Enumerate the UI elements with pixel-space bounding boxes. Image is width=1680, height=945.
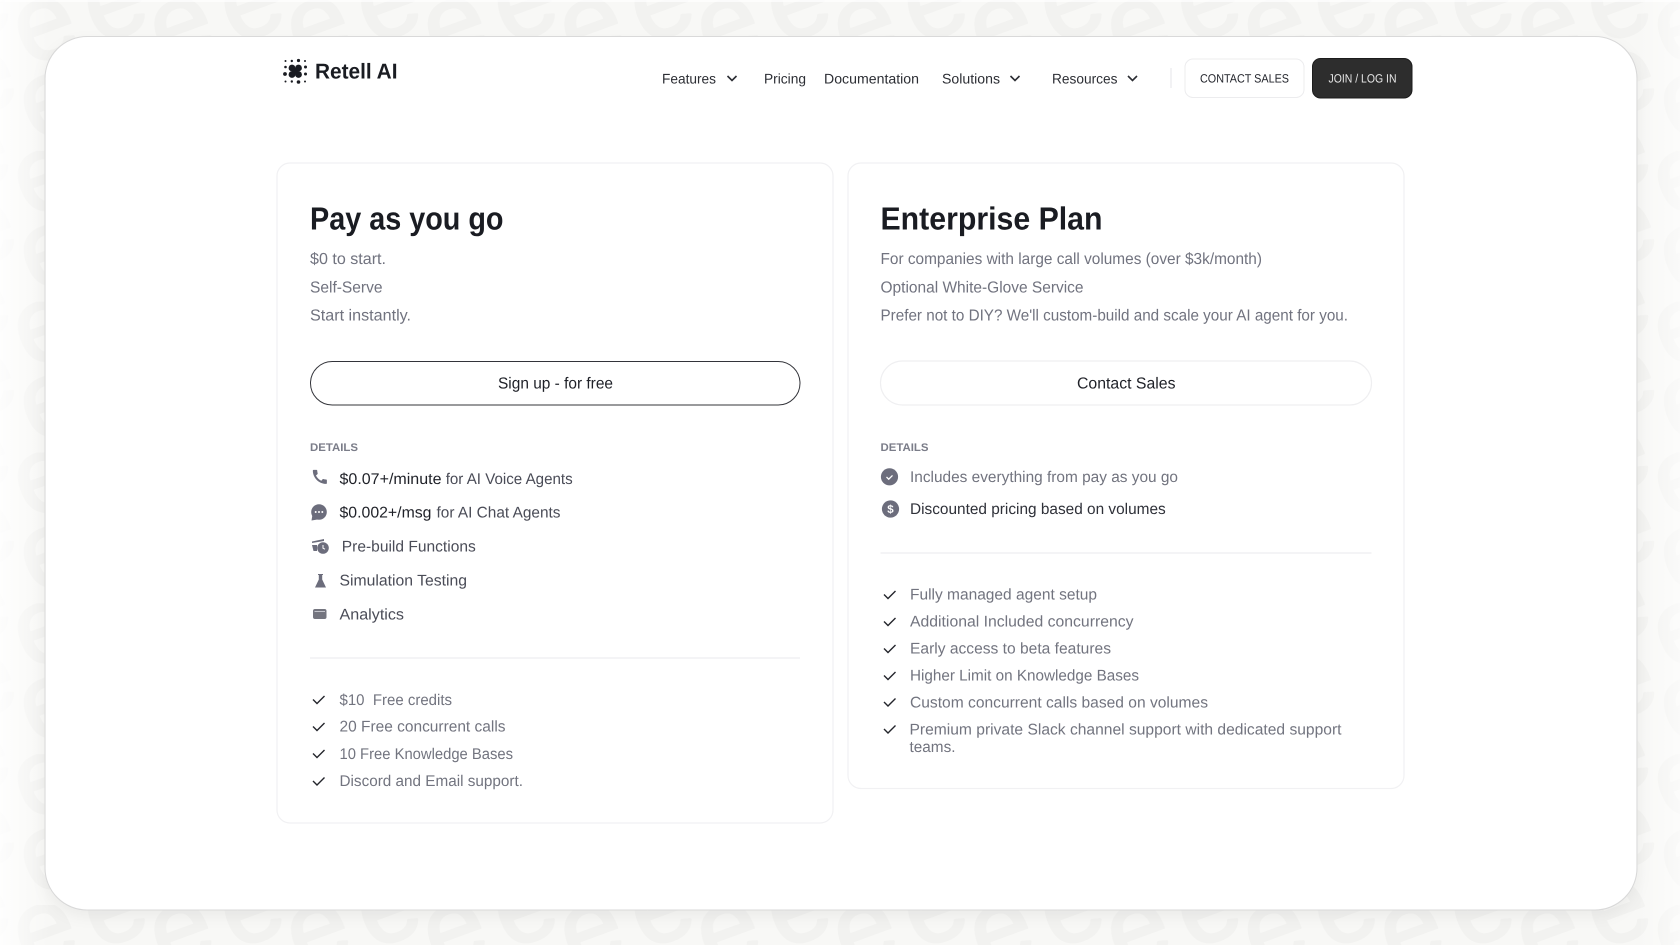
item: slack support xyxy=(884,722,1342,756)
intro text: $0 to start. xyxy=(310,251,386,268)
details label: DETAILS xyxy=(880,442,928,454)
discounted row: $ xyxy=(887,504,894,516)
button: join / log in: JOIN / LOG IN xyxy=(1328,72,1396,86)
button: contact sales: CONTACT SALES xyxy=(1200,72,1289,86)
heading: pay as you go: Pay as you go xyxy=(310,200,504,236)
voice price row: for AI Voice Agents xyxy=(446,471,573,488)
intro text xyxy=(310,251,411,324)
intro text: Start instantly. xyxy=(310,308,411,324)
button: sign up xyxy=(310,362,800,405)
item: beta: Early access to beta features xyxy=(910,640,1111,658)
voice price row: $0.07+/minute xyxy=(340,471,442,488)
button: contact sales: Contact Sales xyxy=(1077,376,1176,393)
nav item: Solutions: Solutions xyxy=(942,70,1000,86)
logo: Retell AI xyxy=(283,59,398,84)
details label: DETAILS xyxy=(310,442,358,454)
simulation row: Simulation Testing xyxy=(340,572,467,590)
analytics row xyxy=(313,606,404,624)
nav item: Features: Features xyxy=(662,70,716,86)
item: concurrency: Additional Included concurrency xyxy=(910,614,1134,630)
analytics row: Analytics xyxy=(340,606,404,624)
intro text: Self-Serve xyxy=(310,280,383,296)
intro text: Optional White-Glove Service xyxy=(880,280,1084,296)
nav item: Documentation: Documentation xyxy=(824,70,919,86)
details list xyxy=(311,470,573,624)
intro text xyxy=(880,251,1348,324)
intro text: For companies with large call volumes (over $3k/month) xyxy=(880,251,1262,268)
heading: enterprise plan: Enterprise Plan xyxy=(880,200,1102,236)
item: support: Discord and Email support. xyxy=(340,773,523,790)
panel: enterprise plan xyxy=(848,163,1404,788)
item: custom calls: Custom concurrent calls based on volumes xyxy=(910,694,1208,712)
wordmark: Retell AI xyxy=(315,60,398,84)
functions row: Pre-build Functions xyxy=(342,538,476,556)
item: concurrent calls: 20 Free concurrent calls xyxy=(340,718,506,736)
chat price row: $0.002+/msg xyxy=(340,505,432,522)
button: contact sales xyxy=(1185,59,1304,98)
discounted row: Discounted pricing based on volumes xyxy=(910,501,1166,518)
chat price row xyxy=(311,504,561,522)
item: knowledge bases: 10 Free Knowledge Bases xyxy=(340,746,513,763)
button: contact sales xyxy=(880,361,1372,405)
nav item: Pricing: Pricing xyxy=(764,70,806,86)
includes row: Includes everything from pay as you go xyxy=(910,469,1178,486)
icon: logo mark xyxy=(283,59,307,84)
navigation bar xyxy=(662,58,1412,98)
checklist xyxy=(313,692,523,790)
item: free credits: $10 Free credits xyxy=(340,692,452,709)
chat price row: for AI Chat Agents xyxy=(436,505,561,522)
panel: pay as you go xyxy=(277,163,833,823)
item: slack support: teams. xyxy=(910,739,956,756)
nav item: Resources: Resources xyxy=(1052,70,1118,86)
checklist xyxy=(884,586,1342,756)
item: managed setup: Fully managed agent setup xyxy=(910,586,1097,604)
item: limit: Higher Limit on Knowledge Bases xyxy=(910,668,1139,684)
button: join / log in xyxy=(1312,58,1412,98)
item: slack support: Premium private Slack channel support with dedicated support xyxy=(910,722,1342,738)
details list xyxy=(881,468,1178,518)
intro text: Prefer not to DIY? We'll custom-build and scale your AI agent for you. xyxy=(880,308,1348,324)
voice price row xyxy=(313,470,573,488)
button: sign up: Sign up - for free xyxy=(498,376,613,393)
